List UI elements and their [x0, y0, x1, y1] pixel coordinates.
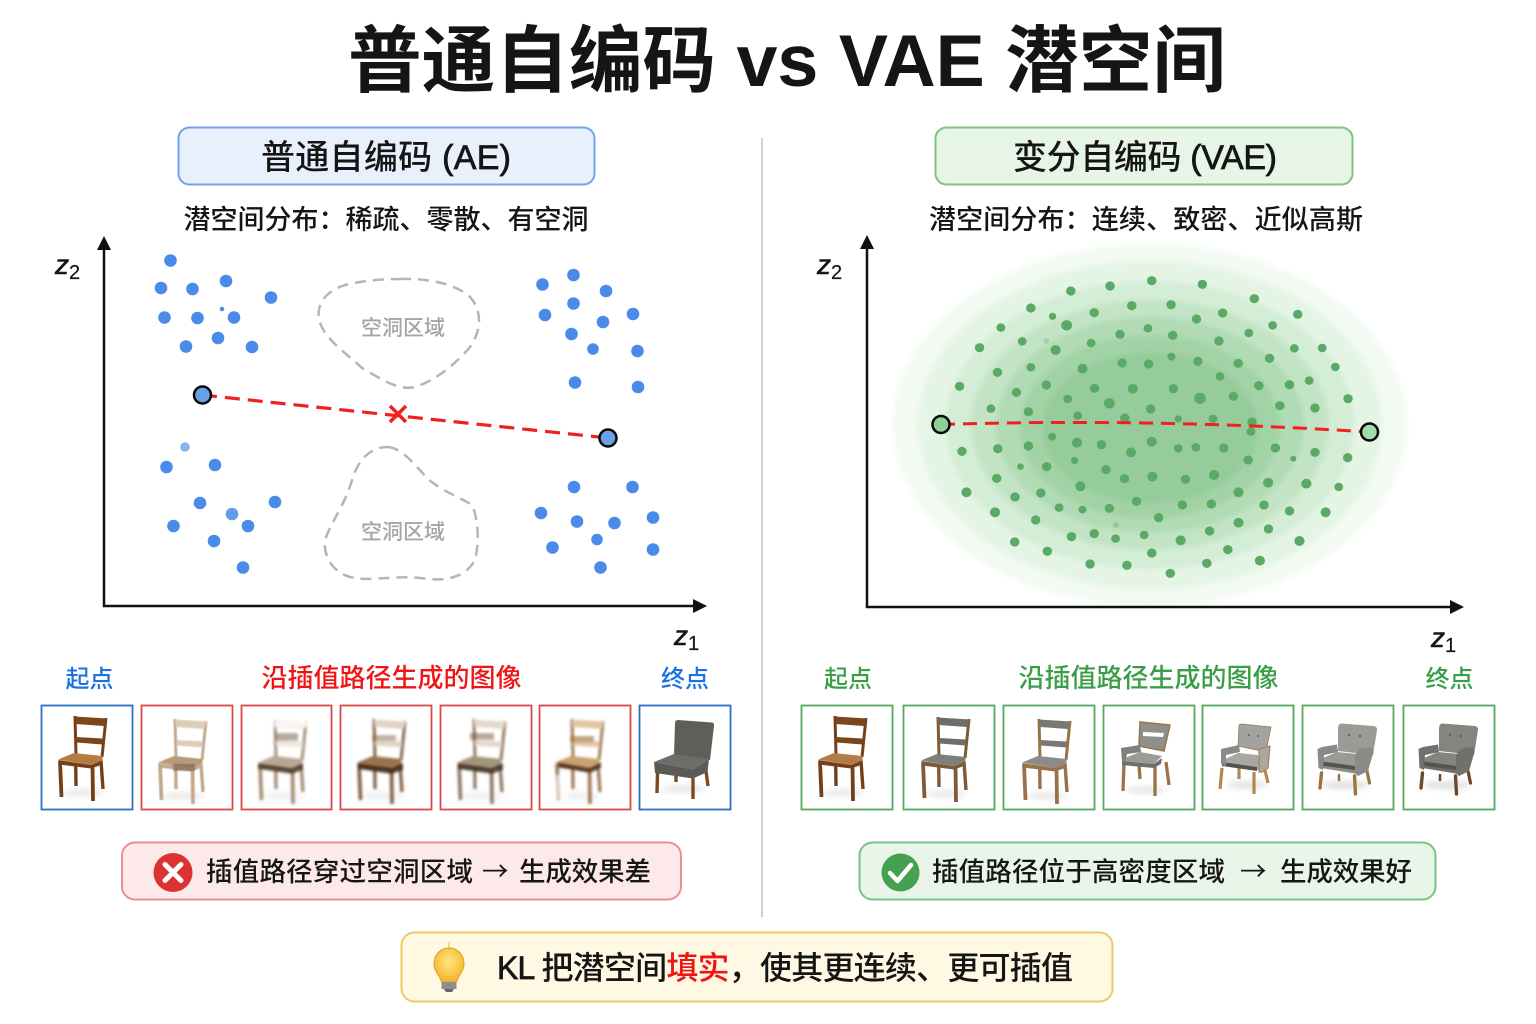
- AE interpolation path: [194, 386, 616, 446]
- AE latent space chart: [54, 236, 707, 655]
- icon: red cross: [154, 853, 192, 892]
- chair: end: [1418, 724, 1478, 794]
- divider: [761, 138, 763, 917]
- VAE strip labels: 终点: [1426, 666, 1474, 693]
- AE strip labels: 终点: [661, 666, 709, 693]
- chair: blurred 2: [258, 715, 310, 804]
- chair: blurred 5: [555, 719, 604, 804]
- hole region top: [319, 279, 479, 388]
- chair: step 5: [1318, 724, 1377, 794]
- KL takeaway callout: [402, 932, 1112, 1002]
- VAE axes: z: [1431, 622, 1445, 653]
- VAE result text: [932, 850, 1412, 889]
- VAE image strip: [802, 706, 1494, 810]
- chair: blurred 3: [357, 719, 406, 804]
- chair: step 1: [921, 717, 970, 802]
- AE axes: 2: [69, 262, 80, 284]
- gaussian density: [893, 244, 1407, 606]
- VAE heading: [936, 128, 1352, 184]
- chair: step 3: [1121, 722, 1170, 796]
- panel: VAE: [802, 128, 1494, 900]
- chair: start: [58, 716, 107, 801]
- KL takeaway callout: KL 把潜空间填实，使其更连续、更可插值: [497, 950, 1073, 986]
- chair: end: [654, 720, 714, 799]
- chair: start: [818, 716, 867, 801]
- chair: blurred 4: [457, 719, 506, 804]
- AE result text: 插值路径穿过空洞区域: [206, 857, 473, 887]
- AE image strip: [42, 706, 730, 810]
- hole region top: 空洞区域: [361, 317, 445, 340]
- AE axes: 1: [688, 633, 699, 655]
- VAE interpolation path: [932, 416, 1378, 440]
- AE result callout: [122, 842, 681, 900]
- AE axes: [54, 236, 707, 655]
- AE axes: z: [55, 249, 69, 280]
- AE strip labels: 起点: [66, 666, 114, 693]
- VAE strip labels: [824, 663, 1474, 693]
- panel: AE: [42, 128, 730, 900]
- VAE result callout: [860, 842, 1436, 900]
- AE result text: 生成效果差: [519, 857, 651, 887]
- VAE axes: 2: [831, 262, 842, 284]
- VAE subtitle: 潜空间分布：连续、致密、近似高斯: [929, 205, 1363, 235]
- chair: step 4: [1220, 724, 1271, 794]
- VAE axes: 1: [1445, 635, 1456, 657]
- AE heading: [178, 128, 594, 184]
- AE strip labels: 沿插值路径生成的图像: [261, 663, 522, 693]
- VAE data points: [955, 276, 1353, 578]
- VAE latent space chart: [816, 235, 1464, 657]
- AE strip labels: [66, 663, 709, 693]
- AE result text: →: [482, 850, 508, 889]
- VAE strip labels: 沿插值路径生成的图像: [1018, 663, 1279, 693]
- VAE axes: [816, 235, 1464, 657]
- AE axes: z: [674, 620, 688, 651]
- chair: blurred 1: [158, 719, 207, 804]
- icon: light bulb: [434, 942, 464, 992]
- AE subtitle: 潜空间分布：稀疏、零散、有空洞: [184, 205, 588, 235]
- VAE heading: 变分自编码 (VAE): [1013, 139, 1277, 177]
- AE result text: [206, 850, 651, 889]
- VAE strip labels: 起点: [824, 666, 872, 693]
- VAE axes: z: [817, 249, 831, 280]
- AE heading: 普通自编码 (AE): [261, 139, 511, 177]
- AE data points: [155, 254, 659, 574]
- VAE result text: 生成效果好: [1280, 857, 1412, 887]
- title: 普通自编码 vs VAE 潜空间: [348, 21, 1226, 102]
- hole region bottom: [325, 447, 478, 579]
- icon: green check: [882, 854, 920, 892]
- VAE result text: →: [1240, 850, 1266, 889]
- chair: step 2: [1022, 719, 1071, 804]
- VAE result text: 插值路径位于高密度区域: [932, 857, 1225, 887]
- hole region bottom: 空洞区域: [361, 521, 445, 544]
